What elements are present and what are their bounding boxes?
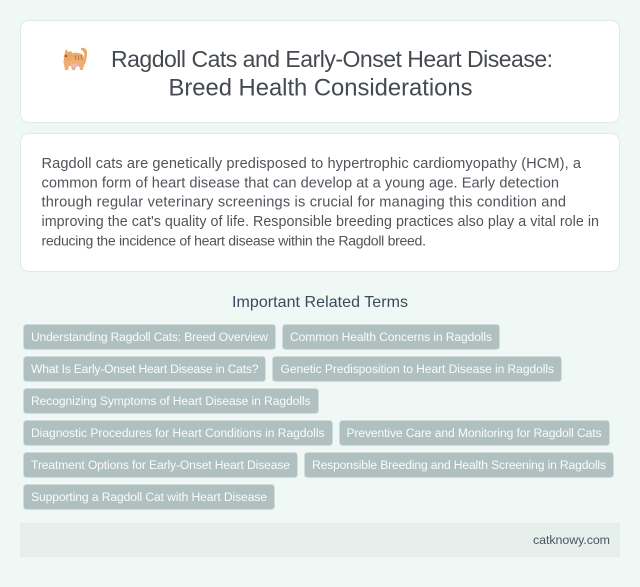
- tag: What Is Early-Onset Heart Disease in Cats?: [31, 362, 259, 376]
- tag: [24, 420, 332, 446]
- title text: [111, 46, 553, 102]
- panel: title header: [20, 20, 620, 122]
- tag: Supporting a Ragdoll Cat with Heart Disease: [31, 490, 267, 504]
- tag: Common Health Concerns in Ragdolls: [290, 330, 492, 344]
- tag list: [24, 324, 614, 510]
- tag: [272, 356, 562, 382]
- tag: [24, 452, 298, 478]
- footer: catknowy.com: [533, 533, 610, 547]
- panel: description: [20, 134, 620, 272]
- tag: [24, 388, 318, 414]
- description text: through regular veterinary screenings is crucial for managing this condition and: [42, 195, 566, 211]
- tag: [24, 356, 266, 382]
- title text: Breed Health Considerations: [168, 74, 473, 102]
- title text: Ragdoll Cats and Early-Onset Heart Disease:: [111, 46, 553, 72]
- heading: important related terms: Important Related Terms: [232, 294, 408, 311]
- tag: Recognizing Symptoms of Heart Disease in Ragdolls: [31, 394, 310, 408]
- tag: [340, 420, 610, 446]
- tag: Genetic Predisposition to Heart Disease in Ragdolls: [280, 362, 554, 376]
- tag: Responsible Breeding and Health Screening in Ragdolls: [312, 458, 606, 472]
- tag: [304, 452, 614, 478]
- description text: Ragdoll cats are genetically predisposed to hypertrophic cardiomyopathy (HCM), a: [42, 156, 582, 172]
- tag: Treatment Options for Early-Onset Heart Disease: [31, 458, 290, 472]
- description text: [42, 156, 599, 248]
- tag: [24, 484, 274, 510]
- description text: improving the cat's quality of life. Responsible breeding practices also play a vital role in: [42, 214, 599, 230]
- description text: common form of heart disease that can develop at a young age. Early detection: [42, 175, 559, 191]
- tag: [282, 324, 500, 350]
- icon: cat: [64, 48, 87, 70]
- tag: Understanding Ragdoll Cats: Breed Overview: [31, 330, 268, 344]
- description text: reducing the incidence of heart disease within the Ragdoll breed.: [42, 232, 426, 248]
- tag: Preventive Care and Monitoring for Ragdoll Cats: [346, 426, 602, 440]
- footer: [20, 523, 620, 557]
- tag: Diagnostic Procedures for Heart Conditions in Ragdolls: [31, 426, 324, 440]
- tag: [24, 324, 276, 350]
